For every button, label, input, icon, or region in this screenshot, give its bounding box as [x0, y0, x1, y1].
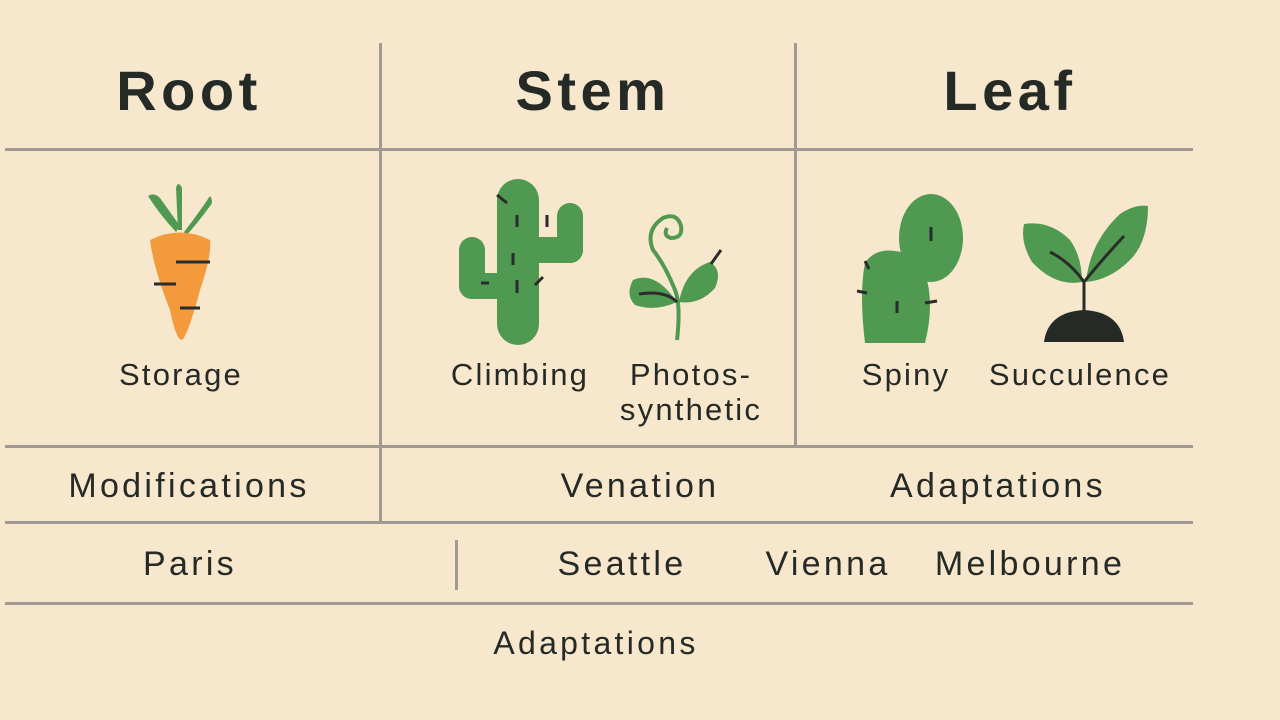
label: Photosynthetic: synthetic	[620, 392, 762, 427]
label: Spiny: Spiny	[862, 357, 950, 392]
icon: succulent sprout	[1023, 206, 1148, 342]
icon: cactus	[459, 179, 583, 345]
row label: Venation: Venation	[561, 467, 719, 505]
heading: Root: Root	[116, 59, 262, 122]
city: Vienna: Vienna	[765, 545, 891, 583]
icon: spiny cactus	[856, 194, 963, 343]
heading: Leaf: Leaf	[943, 59, 1077, 122]
label: Succulence: Succulence	[989, 357, 1171, 392]
label: Storage: Storage	[119, 357, 243, 392]
label: Climbing: Climbing	[451, 357, 589, 392]
city: Melbourne: Melbourne	[935, 545, 1125, 583]
label: Photosynthetic: Photos-	[630, 357, 752, 392]
city: Paris: Paris	[143, 545, 237, 583]
row label: Modifications: Modifications	[68, 467, 310, 505]
city: Seattle: Seattle	[558, 545, 686, 583]
footer: Adaptations: Adaptations	[493, 625, 699, 661]
label: Photosynthetic	[620, 357, 762, 427]
heading: Stem: Stem	[516, 59, 670, 122]
icon: carrot	[148, 184, 212, 340]
row label: Adaptations: Adaptations	[890, 467, 1106, 505]
icon: tendril seedling	[629, 214, 722, 340]
